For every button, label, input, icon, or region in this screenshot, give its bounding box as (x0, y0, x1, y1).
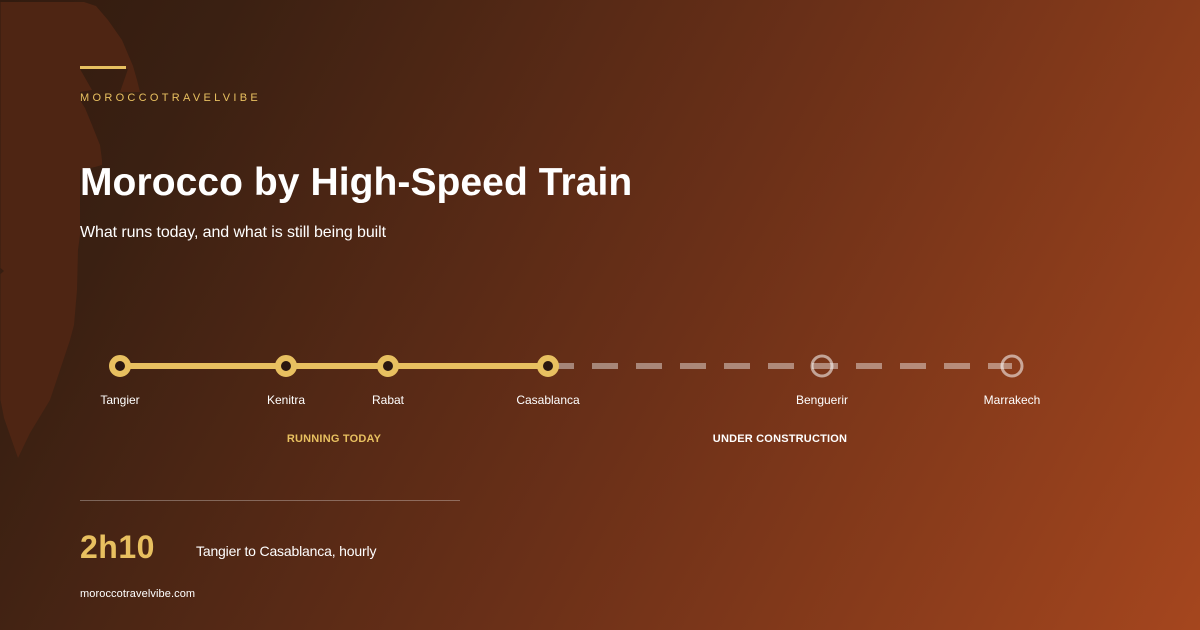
line: running today segment (120, 363, 548, 369)
label: Kenitra: Kenitra (267, 393, 305, 407)
stat description: Tangier to Casablanca, hourly (196, 543, 376, 559)
station: Benguerir (812, 356, 832, 376)
website: moroccotravelvibe.com (80, 588, 195, 600)
station: Marrakech (1002, 356, 1022, 376)
label: Rabat: Rabat (372, 393, 405, 407)
label: Casablanca: Casablanca (516, 393, 580, 407)
station: Kenitra (278, 358, 294, 374)
title: Morocco by High-Speed Train (80, 161, 632, 204)
station: Rabat (380, 358, 396, 374)
brand name: MOROCCOTRAVELVIBE (80, 92, 261, 104)
accent bar (80, 66, 126, 69)
divider (80, 500, 460, 501)
station: Tangier (112, 358, 128, 374)
line: under construction segment (548, 363, 1012, 369)
subtitle: What runs today, and what is still being built (80, 224, 386, 241)
stat value: 2h10 (80, 529, 155, 565)
label: Tangier: Tangier (100, 393, 140, 407)
status: under construction: UNDER CONSTRUCTION (713, 433, 847, 445)
status: running today: RUNNING TODAY (287, 433, 382, 445)
label: Benguerir: Benguerir (796, 393, 848, 407)
label: Marrakech: Marrakech (984, 393, 1040, 407)
station: Casablanca (540, 358, 556, 374)
